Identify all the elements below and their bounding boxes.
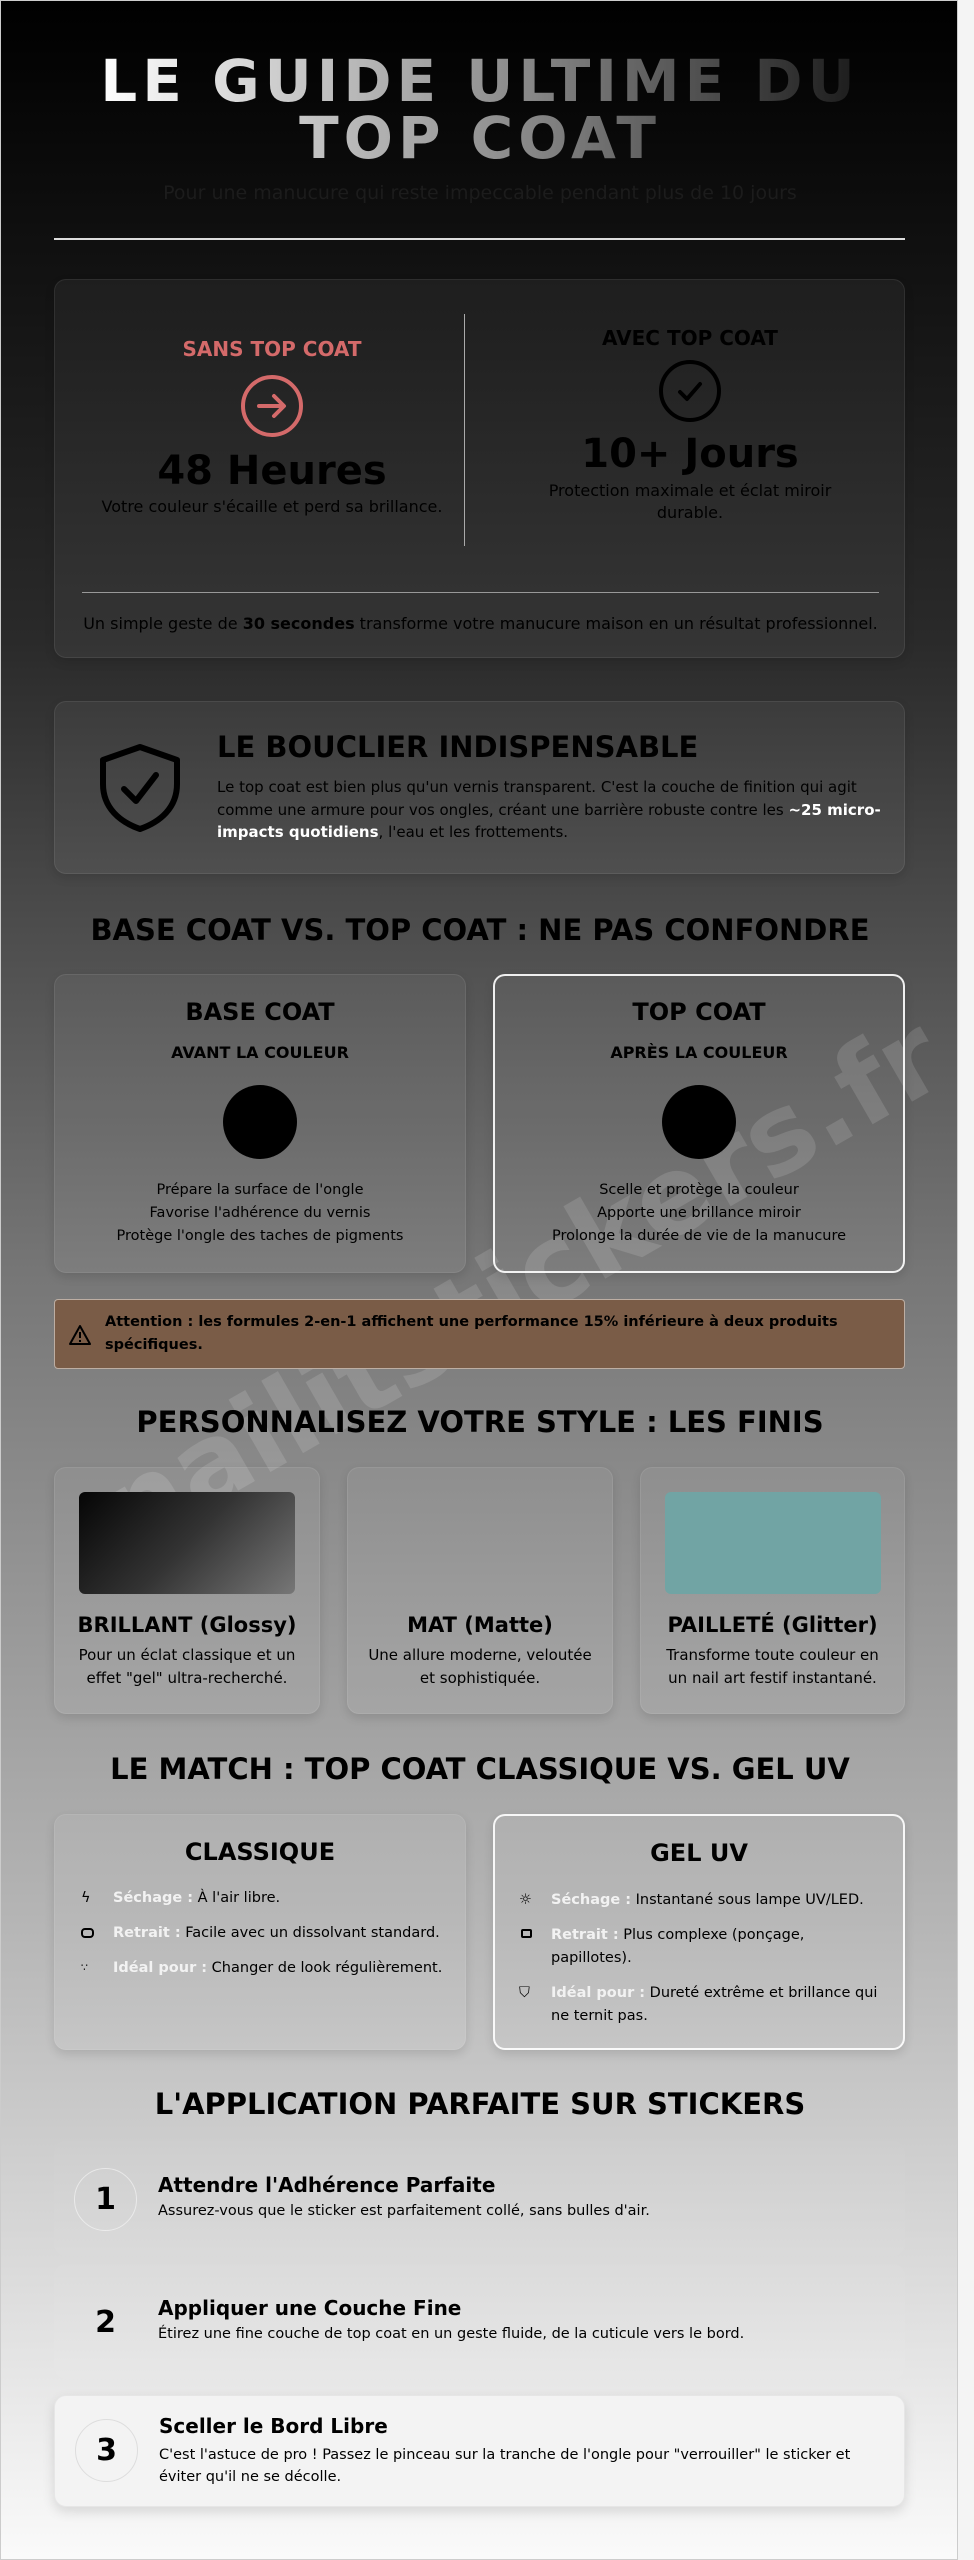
callout: attention (54, 1299, 905, 1369)
callout: attention: Attention : les formules 2-en-1 affichent une performance 15% inférieure à deux produits spécifiques. (105, 1314, 838, 1353)
panel: mat: Une allure moderne, veloutée et sophistiquée. (368, 1646, 592, 1687)
title: LE GUIDE ULTIME DU (100, 47, 860, 115)
panel: brillant: Pour un éclat classique et un effet "gel" ultra-recherché. (79, 1646, 295, 1687)
panel: base coat (54, 974, 466, 1273)
body text: Le top coat est bien plus qu'un vernis transparent. C'est la couche de finition qui agit comme une armure pour vos ongles, créant une barrière robuste contre les ~25 micro-impacts quotidiens, l'eau et les frottements. (217, 778, 881, 841)
step 3: Sceller le Bord Libre (159, 2414, 388, 2438)
subtitle: Pour une manucure qui reste impeccable pendant plus de 10 jours (163, 182, 797, 204)
panel: brillant: BRILLANT (Glossy) (78, 1613, 296, 1637)
step 1 (54, 2141, 905, 2256)
step 2 (54, 2264, 905, 2379)
heading: finis: PERSONNALISEZ VOTRE STYLE : LES FINIS (136, 1405, 824, 1439)
panel: top coat: Apporte une brillance miroir (597, 1205, 801, 1221)
heading: application: L'APPLICATION PARFAITE SUR STICKERS (155, 2087, 805, 2121)
step 2: Appliquer une Couche Fine (158, 2296, 461, 2320)
title: TOP COAT (299, 104, 661, 172)
panel: brillant (54, 1467, 320, 1714)
step 2: 2 (95, 2305, 116, 2340)
swatch glossy (79, 1492, 295, 1594)
panel: top coat: Prolonge la durée de vie de la manucure (552, 1228, 846, 1244)
step 1: Assurez-vous que le sticker est parfaitement collé, sans bulles d'air. (158, 2203, 650, 2219)
panel: gel uv (493, 1814, 905, 2050)
panel: classique: Idéal pour : Changer de look régulièrement. (113, 1960, 442, 1976)
panel: bouclier (54, 701, 905, 874)
panel: comparison (54, 279, 905, 658)
panel: gel uv: Séchage : Instantané sous lampe UV/LED. (551, 1892, 864, 1908)
icon: circle (662, 1085, 736, 1159)
step 2: Étirez une fine couche de top coat en un geste fluide, de la cuticule vers le bord. (158, 2326, 744, 2342)
panel: pailleté (640, 1467, 905, 1714)
panel: classique (54, 1814, 466, 2050)
panel: base coat: Prépare la surface de l'ongle (156, 1182, 364, 1198)
avec top coat: Protection maximale et éclat miroir durable. (549, 481, 831, 522)
panel: gel uv: ⛉ (519, 1985, 530, 2001)
swatch glitter (664, 1492, 880, 1594)
step 1: 1 (95, 2182, 116, 2217)
sans top coat (102, 337, 442, 516)
step 3 (54, 2395, 905, 2507)
panel: top coat: Scelle et protège la couleur (599, 1182, 799, 1198)
panel: mat (347, 1467, 613, 1714)
icon: arrow circle (241, 375, 303, 437)
icon: shield (100, 744, 180, 832)
panel: pailleté: PAILLETÉ (Glitter) (667, 1613, 878, 1637)
panel: gel uv: Retrait : Plus complexe (ponçage, (551, 1927, 804, 1943)
step 3: 3 (96, 2433, 117, 2468)
panel: gel uv: ☼ (519, 1892, 532, 1908)
panel: classique: Retrait : Facile avec un dissolvant standard. (113, 1925, 440, 1941)
panel: gel uv: Idéal pour : Dureté extrême et brillance qui ne ternit pas. (551, 1985, 877, 2024)
avec top coat (549, 326, 832, 522)
sans top coat: 48 Heures (157, 448, 387, 494)
footer text: Un simple geste de 30 secondes transforme votre manucure maison en un résultat professionnel. (83, 614, 878, 633)
panel: top coat (493, 974, 905, 1273)
icon: warning (69, 1325, 91, 1345)
title (1, 53, 959, 167)
panel: base coat: BASE COAT (185, 998, 335, 1026)
panel: classique: ϟ (81, 1890, 91, 1906)
panel: top coat: APRÈS LA COULEUR (610, 1043, 788, 1062)
sans top coat: SANS TOP COAT (183, 337, 361, 361)
heading: match: LE MATCH : TOP COAT CLASSIQUE VS. GEL UV (110, 1752, 850, 1786)
step 1: Attendre l'Adhérence Parfaite (158, 2173, 495, 2197)
panel: base coat: Protège l'ongle des taches de pigments (117, 1228, 403, 1244)
panel: gel uv: GEL UV (650, 1839, 748, 1867)
panel: gel uv: papillotes). (551, 1950, 632, 1966)
step 3: C'est l'astuce de pro ! Passez le pinceau sur la tranche de l'ongle pour "verrouiller" le sticker et éviter qu'il ne se décolle. (159, 2447, 850, 2485)
panel: top coat: TOP COAT (632, 998, 766, 1026)
panel: base coat: AVANT LA COULEUR (171, 1043, 349, 1062)
heading: LE BOUCLIER INDISPENSABLE (217, 730, 698, 764)
panel: classique: ∵ (81, 1961, 88, 1974)
panel: pailleté: Transforme toute couleur en un nail art festif instantané. (666, 1646, 879, 1687)
avec top coat: AVEC TOP COAT (602, 326, 778, 350)
watermark: nailitstickers.fr (79, 991, 958, 1575)
panel: classique: CLASSIQUE (185, 1838, 335, 1866)
panel: classique: Séchage : À l'air libre. (113, 1890, 280, 1906)
panel: base coat: Favorise l'adhérence du vernis (150, 1205, 370, 1221)
sans top coat: Votre couleur s'écaille et perd sa brillance. (102, 497, 442, 516)
icon: circle (223, 1085, 297, 1159)
heading: base vs top: BASE COAT VS. TOP COAT : NE PAS CONFONDRE (90, 913, 870, 947)
panel: mat: MAT (Matte) (407, 1613, 553, 1637)
avec top coat: 10+ Jours (581, 431, 799, 477)
icon: check circle (659, 360, 721, 422)
